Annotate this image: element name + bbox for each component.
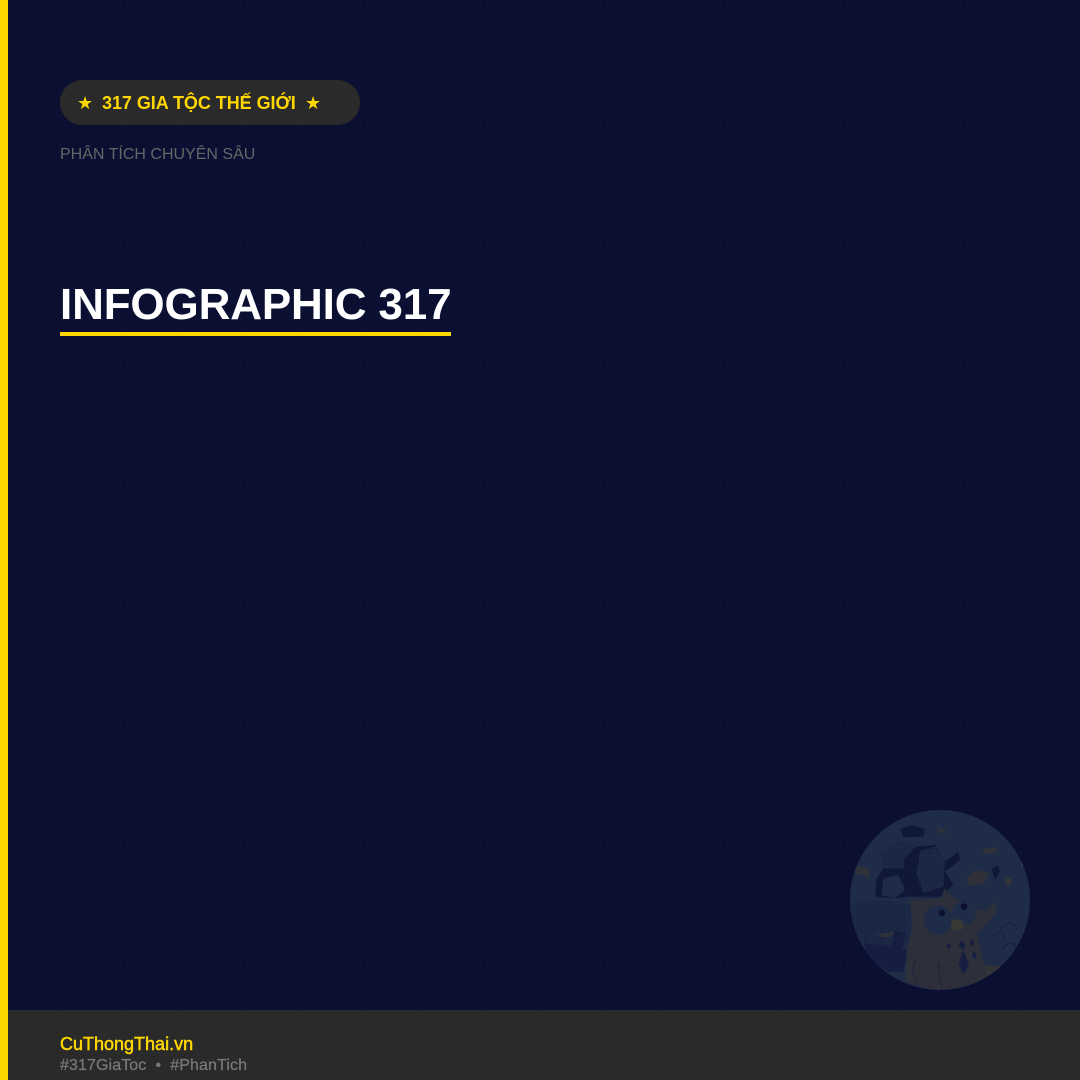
badge: 317 gia tộc thế giới bbox=[60, 80, 360, 125]
badge star left: ★ bbox=[77, 93, 93, 113]
badge text: 317 GIA TỘC THẾ GIỚI bbox=[102, 93, 296, 113]
footer hashtags: #317GiaToc • #PhanTich bbox=[60, 1057, 247, 1074]
accent bar: left edge bbox=[0, 0, 8, 1080]
footer brand: CuThongThai.vn bbox=[60, 1034, 193, 1054]
subtitle: PHÂN TÍCH CHUYÊN SÂU bbox=[60, 146, 255, 163]
title underline bbox=[60, 332, 451, 336]
footer bar bbox=[8, 1010, 1080, 1080]
illustration: owl and characters watermark bbox=[850, 810, 1030, 990]
badge star right: ★ bbox=[305, 93, 321, 113]
title: INFOGRAPHIC 317 bbox=[60, 280, 451, 329]
